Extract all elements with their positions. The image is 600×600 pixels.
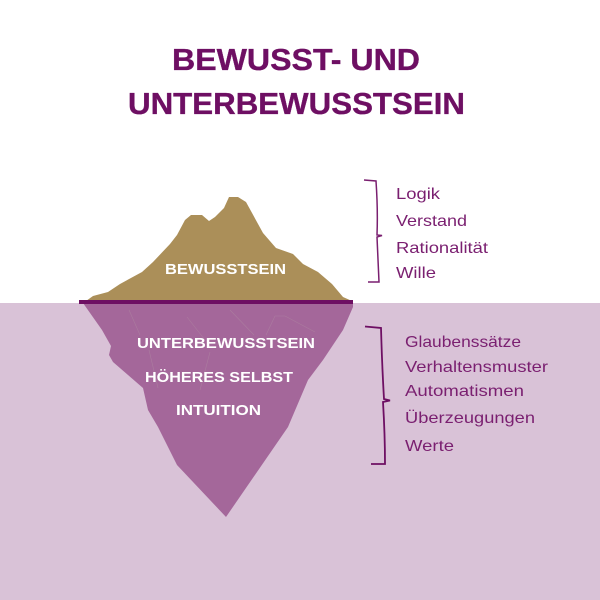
water background — [0, 303, 600, 600]
list: subconscious traits: Überzeugungen — [405, 409, 535, 427]
iceberg: below water: UNTERBEWUSSTSEIN — [137, 335, 315, 352]
list: conscious traits: Rationalität — [396, 240, 489, 257]
title — [128, 42, 465, 121]
list: conscious traits — [396, 186, 489, 282]
title: UNTERBEWUSSTSEIN — [128, 86, 465, 121]
iceberg: above water — [86, 197, 352, 301]
bracket: conscious — [364, 180, 382, 282]
list: conscious traits: Wille — [396, 265, 436, 282]
iceberg: below water — [83, 303, 353, 517]
list: subconscious traits: Automatismen — [405, 383, 524, 400]
list: subconscious traits: Verhaltensmuster — [405, 359, 549, 376]
list: subconscious traits: Glaubenssätze — [405, 334, 521, 351]
list: conscious traits: Verstand — [396, 213, 467, 230]
list: subconscious traits: Werte — [405, 438, 454, 455]
water line — [79, 300, 353, 304]
bracket: subconscious — [365, 326, 390, 464]
iceberg: below water: HÖHERES SELBST — [145, 369, 293, 386]
list: subconscious traits — [405, 334, 549, 455]
iceberg: below water: INTUITION — [176, 402, 261, 419]
title: BEWUSST- UND — [172, 42, 420, 77]
iceberg: above water: BEWUSSTSEIN — [165, 261, 286, 278]
list: conscious traits: Logik — [396, 186, 441, 203]
